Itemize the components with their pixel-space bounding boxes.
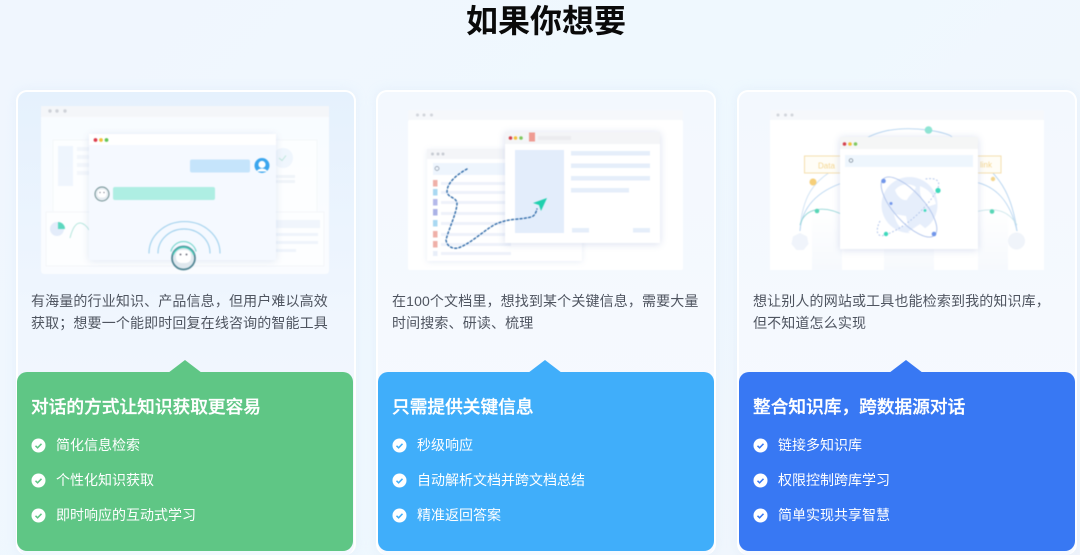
text: card 3 description: 想让别人的网站或工具也能检索到我的知识库， (753, 293, 1050, 309)
list item: 秒级响应 (417, 437, 473, 453)
text: card 1 description (31, 293, 328, 330)
list item: 个性化知识获取 (56, 472, 154, 488)
icon: user avatar (254, 158, 270, 173)
illustration: document search (408, 110, 683, 270)
icon: bot avatar (95, 187, 109, 201)
label: Data: Data (818, 162, 835, 170)
panel: card 3 background (737, 90, 1077, 555)
heading: 整合知识库，跨数据源对话 (753, 397, 965, 417)
heading: 只需提供关键信息 (392, 397, 534, 417)
text: card 3 description (753, 293, 1050, 330)
text: card 1 description: 有海量的行业知识、产品信息，但用户难以高效 (31, 293, 328, 309)
list item: 简化信息检索 (56, 437, 140, 453)
list item: 权限控制跨库学习 (778, 472, 890, 488)
icon: robot (172, 246, 195, 270)
list item: 自动解析文档并跨文档总结 (417, 472, 585, 488)
panel: dark blue solution (739, 372, 1075, 551)
panel: card 1 background (16, 90, 356, 555)
panel: green solution (17, 372, 353, 551)
panel: blue solution (378, 372, 714, 551)
pointer: green panel (168, 360, 202, 373)
heading: 对话的方式让知识获取更容易 (31, 397, 261, 417)
illustration: connected knowledge globe (770, 110, 1044, 270)
title: 如果你想要 (466, 3, 626, 39)
list item: 即时响应的互动式学习 (56, 507, 196, 523)
pointer: dark blue panel (889, 360, 923, 373)
list item: 精准返回答案 (417, 507, 501, 523)
text: card 2 description: 时间搜索、研读、梳理 (392, 314, 533, 330)
icon: globe (872, 169, 946, 245)
text: card 1 description: 获取；想要一个能即时回复在线咨询的智能工具 (31, 314, 328, 330)
list item: 链接多知识库 (778, 437, 862, 453)
label: link (970, 156, 1001, 173)
list item (392, 437, 473, 453)
text: card 2 description: 在100个文档里，想找到某个关键信息，需要大量 (392, 293, 699, 309)
list item: 简单实现共享智慧 (778, 507, 890, 523)
panel: card 2 background (376, 90, 716, 555)
icon: signal arcs (149, 222, 220, 253)
illustration: chat window (41, 106, 329, 274)
text: card 3 description: 但不知道怎么实现 (753, 314, 866, 330)
pointer: blue panel (528, 360, 562, 373)
arrow: dashed path (446, 169, 547, 248)
text: card 2 description (392, 293, 699, 330)
label: Data (804, 156, 846, 173)
icons: file list (433, 180, 438, 256)
label: link: link (980, 160, 993, 170)
